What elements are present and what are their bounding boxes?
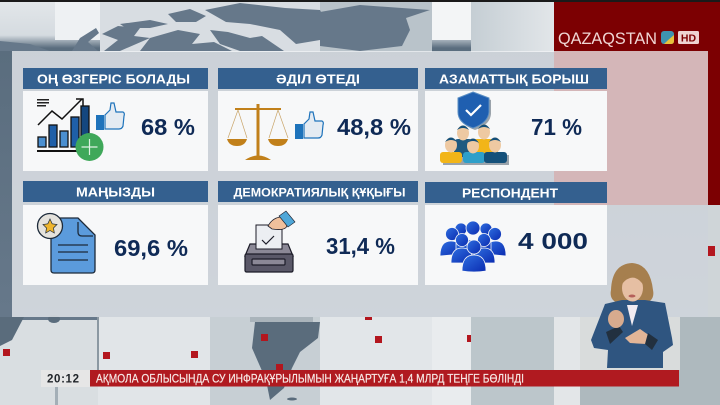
heading: ӘДІЛ ӨТЕДІ (276, 72, 360, 86)
heading (23, 68, 208, 89)
heading: РЕСПОНДЕНТ (462, 186, 558, 200)
red logo block (554, 2, 720, 205)
sign language interpreter (591, 263, 673, 368)
top black edge (0, 0, 720, 2)
card body (23, 205, 208, 285)
map: red markers (3, 246, 715, 370)
heading: ДЕМОКРАТИЯЛЫҚ ҚҰҚЫҒЫ (234, 188, 406, 200)
heading (23, 181, 208, 202)
card 2: justice (218, 68, 418, 171)
value: 48,8 % (337, 114, 411, 140)
panel: translucent board (12, 51, 708, 317)
heading: МАҢЫЗДЫ (76, 186, 155, 200)
card 6: respondents (425, 182, 607, 285)
map: south america (252, 322, 320, 400)
icon: crowd of people (440, 221, 506, 272)
heading (425, 68, 607, 89)
heading (425, 182, 607, 203)
value: 4 000 (518, 228, 588, 254)
icon: rising chart with thumbs up (37, 99, 124, 161)
map: northern islands (0, 3, 430, 51)
icon: document with star (38, 214, 95, 273)
value: 69,6 % (114, 235, 188, 261)
value: 68 % (141, 114, 195, 140)
heading: АЗАМАТТЫҚ БОРЫШ (439, 72, 589, 86)
icon: shield over people (440, 92, 509, 165)
value: 71 % (531, 114, 582, 140)
card body (23, 91, 208, 171)
card body (218, 205, 418, 285)
icon: scales with thumbs up (227, 104, 323, 160)
card 5: democratic right (218, 181, 418, 285)
heading (218, 68, 418, 89)
card body (425, 91, 607, 171)
ticker: headline: АҚМОЛА ОБЛЫСЫНДА СУ ИНФРАҚҰРЫЛЫМЫН ЖАҢАРТУҒА 1,4 МЛРД ТЕҢГЕ БӨЛІНДІ (96, 372, 524, 386)
icon: ballot box (245, 211, 295, 272)
card 3: civic duty (425, 68, 607, 171)
ticker: clock (41, 370, 90, 387)
ticker: clock: 20:12 (47, 374, 79, 386)
heading: ОҢ ӨЗГЕРІС БОЛАДЫ (37, 72, 190, 86)
heading (218, 181, 418, 202)
card 4: important (23, 181, 208, 285)
card body (425, 205, 607, 285)
logo: QAZAQSTAN (558, 30, 657, 48)
card 1: positive change (23, 68, 208, 171)
card body (218, 91, 418, 171)
value: 31,4 % (326, 233, 395, 259)
logo: HD (681, 32, 696, 44)
